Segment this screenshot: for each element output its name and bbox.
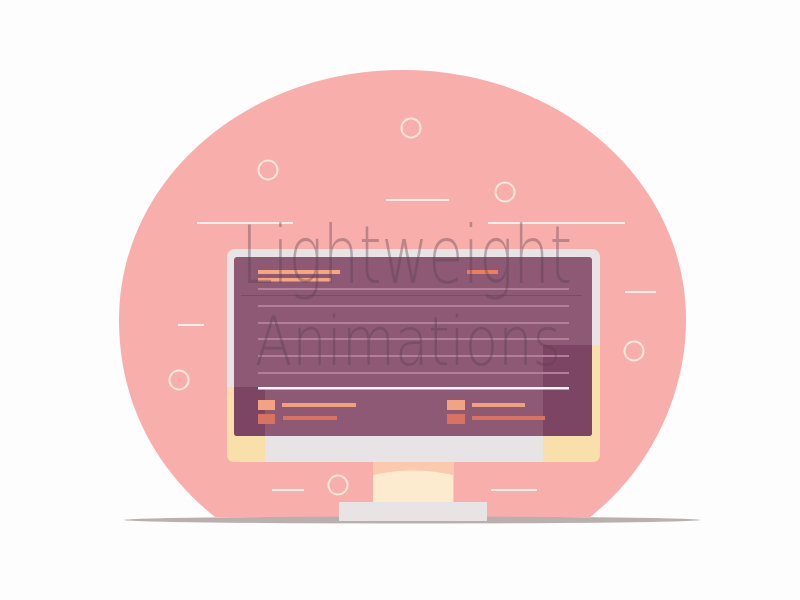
monitor base: [339, 502, 487, 521]
monitor frame: [227, 249, 600, 462]
monitor screen: [234, 257, 592, 436]
watermark: Lightweight: Lightweight: [241, 209, 572, 302]
screen header bars: [258, 270, 498, 282]
screen divider: [258, 387, 569, 390]
screen legend items: [258, 400, 545, 424]
screen table rows: [258, 288, 569, 374]
watermark: Animations: Animations: [255, 303, 561, 382]
monitor stand: [373, 462, 454, 502]
ground shadow: [124, 516, 700, 524]
watermark underline: [241, 295, 582, 296]
decorative circles: [170, 118, 644, 494]
pink background blob: [119, 70, 686, 517]
decorative lines: [178, 199, 656, 491]
